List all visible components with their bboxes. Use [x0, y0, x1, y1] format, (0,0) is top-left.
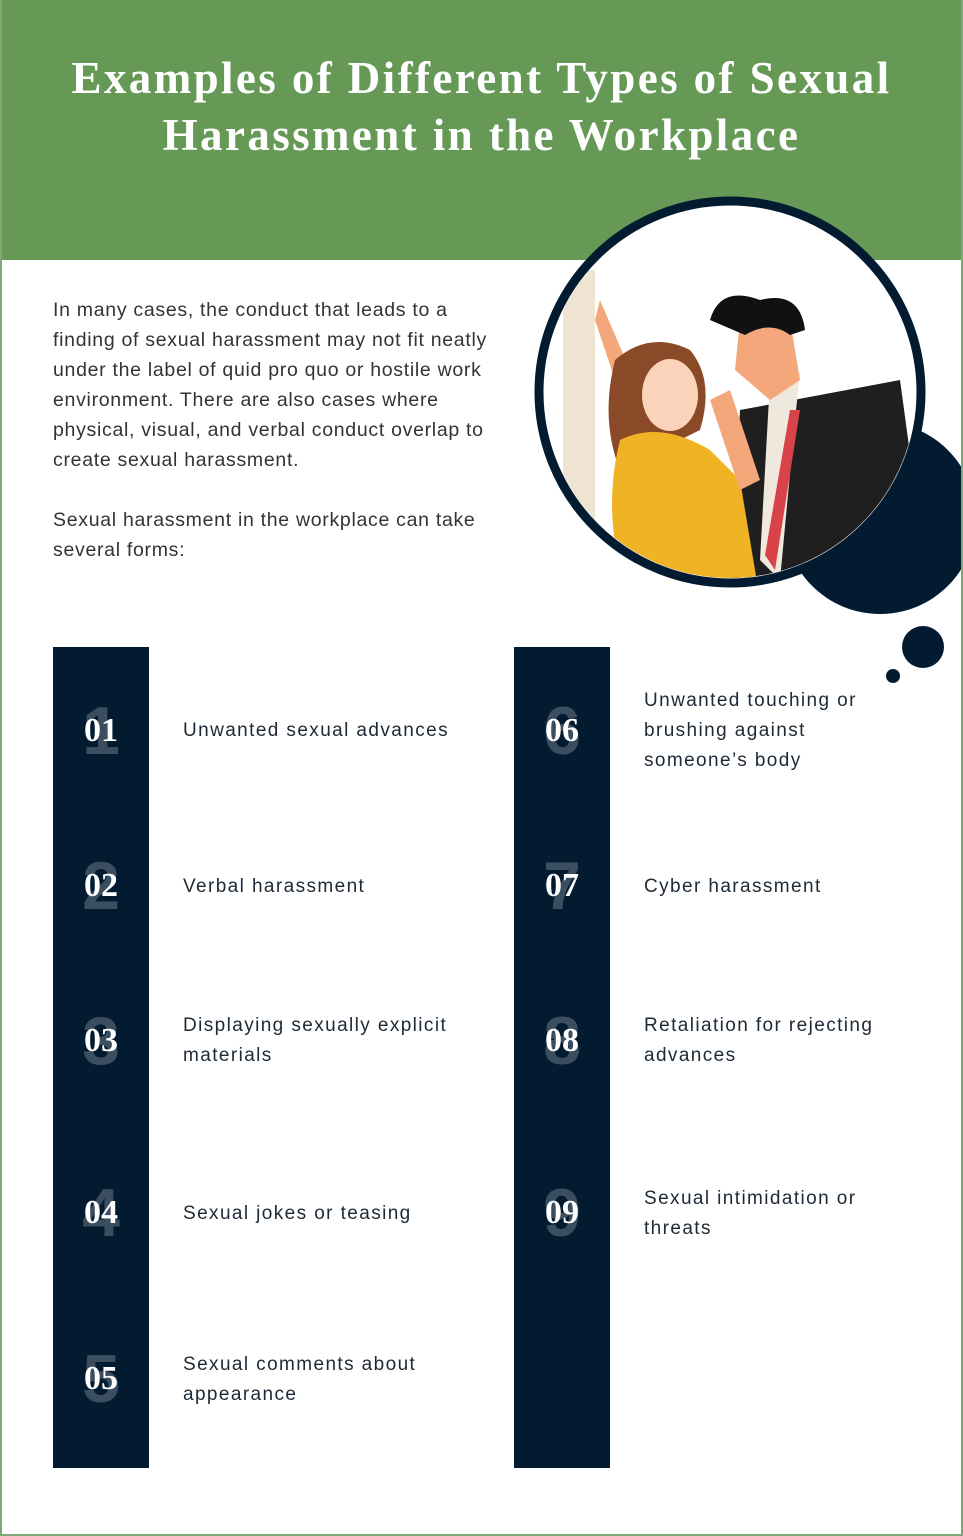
left column bar [53, 647, 149, 1468]
number 08: 08 [545, 1022, 579, 1059]
title: Harassment in the Workplace [163, 110, 800, 160]
item 3: Displaying sexually explicit materials [183, 1015, 447, 1066]
number 01: 01 [84, 712, 118, 749]
number 07: 07 [545, 867, 579, 904]
right column bar [514, 647, 610, 1468]
title: Examples of Different Types of Sexual [71, 53, 892, 103]
number 03: 3 [82, 1003, 120, 1079]
intro text: In many cases, the conduct that leads to a finding of sexual harassment may not fit neatly under the label of quid pro quo or hostile work environment. There are also cases where physical, visual, and verbal conduct overlap to create sexual harassment. [53, 299, 487, 471]
number 03: 03 [84, 1022, 118, 1059]
item 4: Sexual jokes or teasing [183, 1203, 412, 1224]
number 05: 5 [82, 1341, 120, 1417]
item 9: Sexual intimidation or threats [644, 1188, 856, 1239]
number 02: 2 [82, 848, 120, 924]
number 09: 9 [543, 1175, 581, 1251]
intro text [53, 299, 487, 561]
number 02: 02 [84, 867, 118, 904]
item 7: Cyber harassment [644, 876, 822, 897]
item 8: Retaliation for rejecting advances [644, 1015, 873, 1066]
item 6: Unwanted touching or brushing against someone’s body [644, 690, 857, 771]
number 05: 05 [84, 1360, 118, 1397]
item 1: Unwanted sexual advances [183, 720, 449, 741]
number 09: 09 [545, 1194, 579, 1231]
illustration [534, 196, 961, 683]
number 08: 8 [543, 1003, 581, 1079]
header band [0, 0, 963, 260]
intro text: Sexual harassment in the workplace can take several forms: [53, 509, 475, 561]
number 04: 4 [82, 1175, 120, 1251]
number 01: 1 [82, 693, 120, 769]
number 07: 7 [543, 848, 581, 924]
number 06: 06 [545, 712, 579, 749]
title [71, 53, 892, 160]
item 5: Sexual comments about appearance [183, 1354, 416, 1405]
item 2: Verbal harassment [183, 876, 365, 897]
number 06: 6 [543, 693, 581, 769]
number 04: 04 [84, 1194, 118, 1231]
